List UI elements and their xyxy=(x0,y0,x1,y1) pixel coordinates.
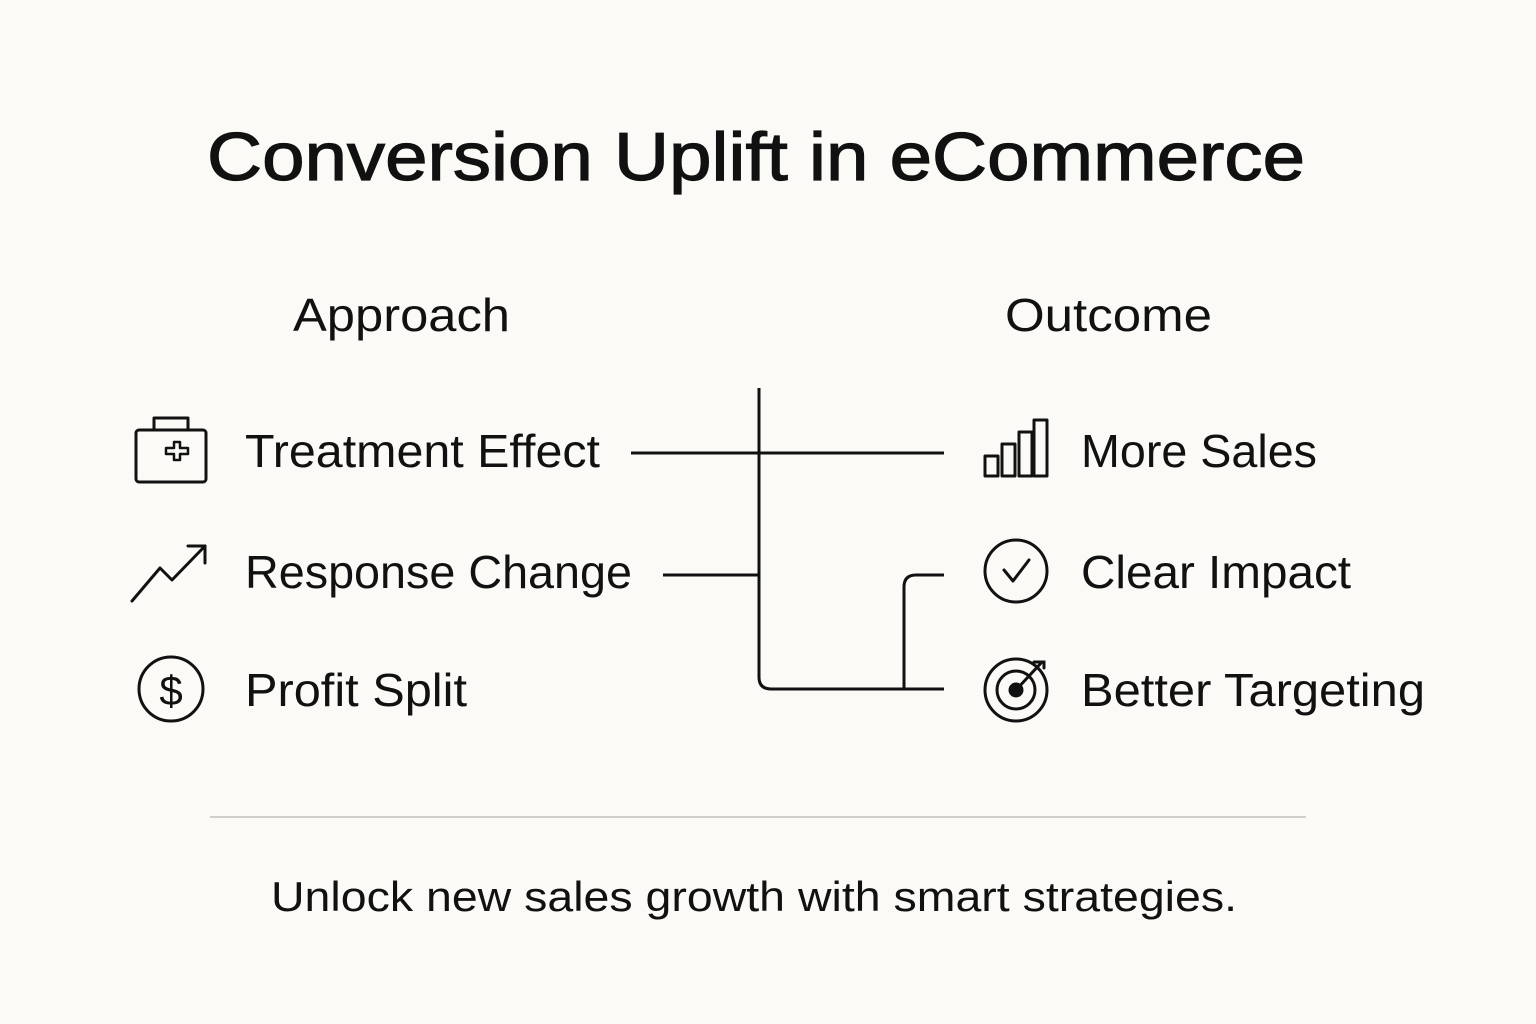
text: clear impact: Clear Impact xyxy=(1081,546,1351,598)
heading: approach: Approach xyxy=(293,289,510,341)
approach items xyxy=(132,418,632,721)
footer text: Unlock new sales growth with smart strategies. xyxy=(271,873,1237,920)
text: treatment effect: Treatment Effect xyxy=(245,425,600,477)
heading: outcome: Outcome xyxy=(1005,289,1212,341)
text: better targeting: Better Targeting xyxy=(1081,664,1425,716)
text: response change: Response Change xyxy=(245,546,632,598)
outcome items xyxy=(985,420,1425,721)
connector lines xyxy=(631,388,944,689)
icon: briefcase xyxy=(136,418,206,482)
text: profit split: Profit Split xyxy=(245,664,467,716)
icon: bar chart xyxy=(985,420,1047,476)
icon: dollar xyxy=(139,657,203,721)
text: more sales: More Sales xyxy=(1081,425,1317,477)
icon: dollar: $ xyxy=(159,667,183,714)
title: Conversion Uplift in eCommerce xyxy=(207,119,1305,195)
icon: target xyxy=(985,659,1047,721)
icon: trend arrow xyxy=(132,546,205,601)
icon: check circle xyxy=(985,540,1047,602)
